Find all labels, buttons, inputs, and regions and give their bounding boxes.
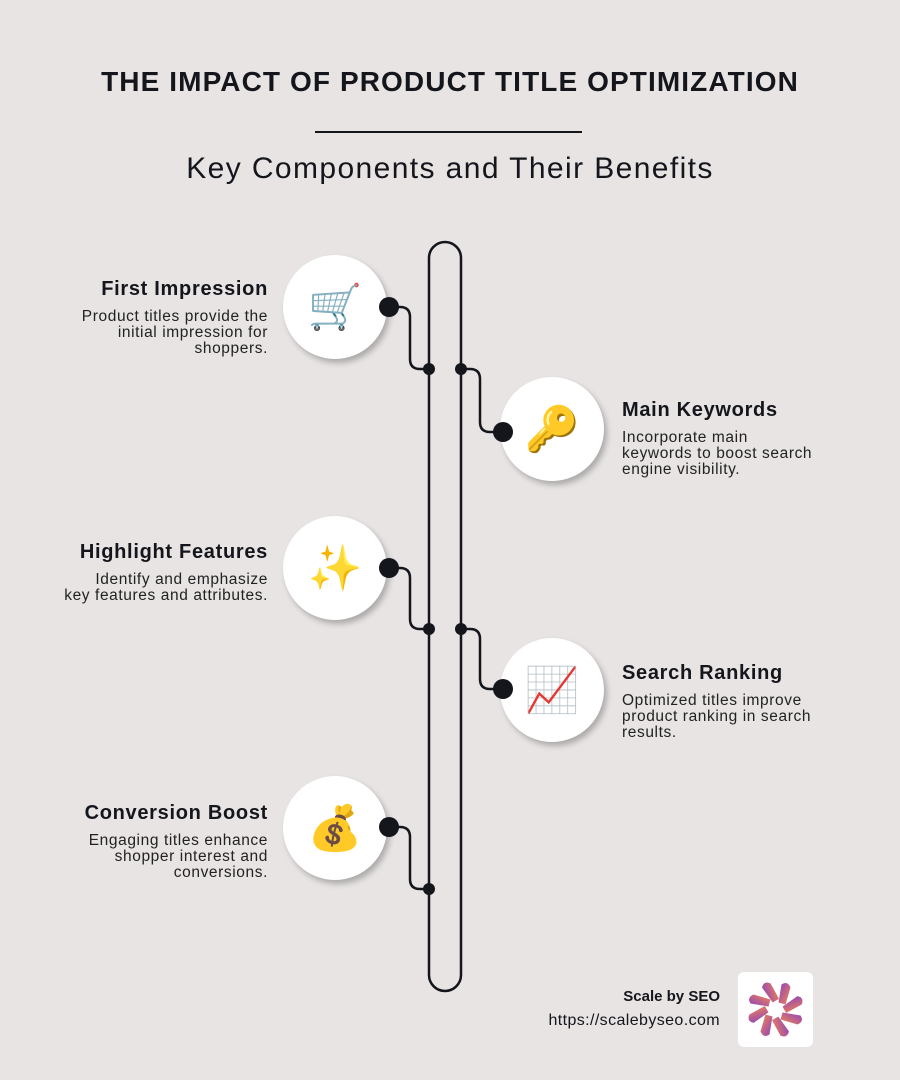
text: highlight features: Identify and emphasize xyxy=(95,571,268,588)
text: first impression: Product titles provide the xyxy=(82,308,268,325)
text: main keywords: Incorporate main xyxy=(622,429,748,446)
text: highlight features: key features and attributes. xyxy=(64,587,268,604)
icon: key xyxy=(500,377,604,481)
text: main keywords xyxy=(622,399,812,478)
text: search ranking xyxy=(622,662,811,741)
text: conversion boost: shopper interest and xyxy=(115,848,268,865)
text: main keywords: engine visibility. xyxy=(622,461,740,478)
text: search ranking: product ranking in search xyxy=(622,708,811,725)
icon: chart: 📈 xyxy=(525,665,579,716)
logo xyxy=(738,972,813,1047)
footer brand: Scale by SEO xyxy=(623,988,720,1005)
text: first impression: First Impression xyxy=(101,278,268,300)
footer brand: https://scalebyseo.com xyxy=(548,1012,720,1029)
text: search ranking: Search Ranking xyxy=(622,662,783,684)
title: THE IMPACT OF PRODUCT TITLE OPTIMIZATION xyxy=(101,66,799,97)
icon: sparkles xyxy=(283,516,387,620)
footer brand xyxy=(548,988,720,1029)
text: main keywords: keywords to boost search xyxy=(622,445,812,462)
icon: cart xyxy=(283,255,387,359)
icon: money bag: 💰 xyxy=(308,803,362,854)
icon: sparkles: ✨ xyxy=(308,543,362,594)
text: highlight features xyxy=(64,541,268,604)
text: conversion boost: Engaging titles enhance xyxy=(89,832,268,849)
icon: money bag xyxy=(283,776,387,880)
text: first impression xyxy=(82,278,268,357)
text: first impression: shoppers. xyxy=(195,340,268,357)
text: conversion boost: Conversion Boost xyxy=(85,802,268,824)
text: search ranking: results. xyxy=(622,724,677,741)
text: search ranking: Optimized titles improve xyxy=(622,692,802,709)
text: main keywords: Main Keywords xyxy=(622,399,778,421)
text: conversion boost: conversions. xyxy=(174,864,268,881)
text: highlight features: Highlight Features xyxy=(80,541,268,563)
text: first impression: initial impression for xyxy=(118,324,268,341)
subtitle: Key Components and Their Benefits xyxy=(186,152,714,185)
icon: cart: 🛒 xyxy=(308,282,362,333)
text: conversion boost xyxy=(85,802,268,881)
icon: key: 🔑 xyxy=(525,404,579,455)
icon: chart xyxy=(500,638,604,742)
